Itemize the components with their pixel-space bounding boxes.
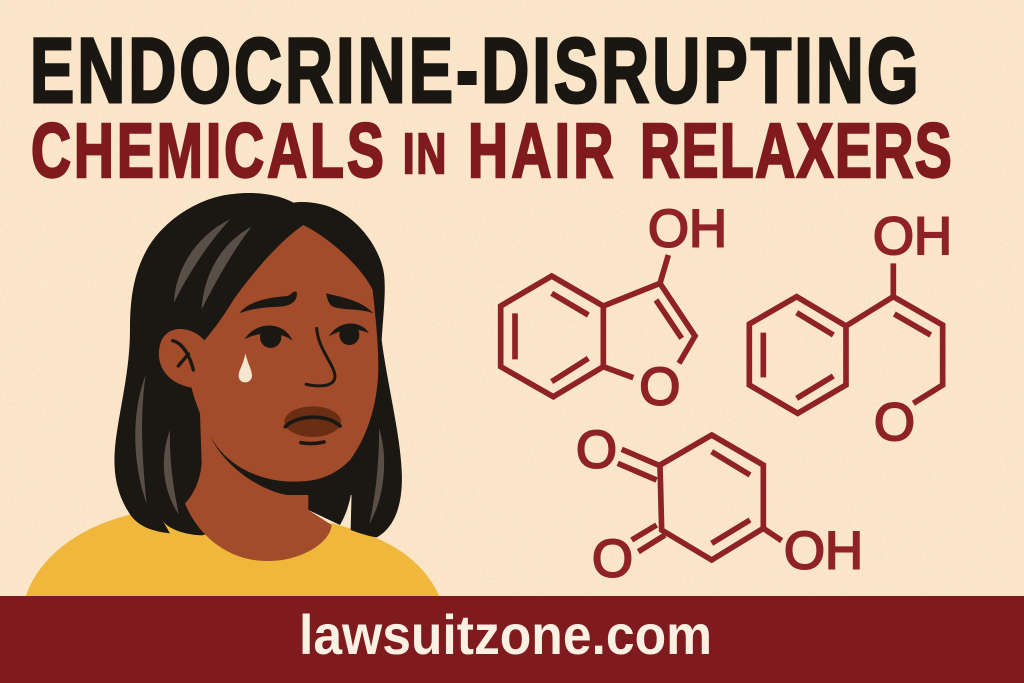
face <box>192 225 378 482</box>
hair highlights <box>135 219 384 524</box>
title line 2 <box>31 108 952 194</box>
ear <box>159 329 207 388</box>
molecule 2: OH <box>873 207 952 266</box>
molecule 1 <box>501 200 727 416</box>
eyebrows <box>239 291 373 313</box>
molecule 2: O <box>874 393 915 452</box>
nose <box>306 328 335 386</box>
title line 2: HAIR <box>468 108 613 194</box>
molecule 3: OH <box>784 521 863 580</box>
tear drop <box>239 353 252 382</box>
mouth <box>284 406 341 437</box>
molecule 3: O <box>592 530 633 589</box>
ear detail <box>173 341 193 370</box>
shirt <box>26 515 439 596</box>
molecule 3 <box>576 421 863 589</box>
footer website text: lawsuitzone.com <box>299 603 712 666</box>
chemical structures <box>501 200 952 589</box>
hair <box>114 193 402 537</box>
eyes <box>244 323 369 348</box>
title line 2: IN <box>403 121 446 186</box>
title line 1: ENDOCRINE-DISRUPTING <box>30 18 918 122</box>
illustration: worried woman <box>26 193 439 596</box>
title line 2: CHEMICALS <box>31 108 384 194</box>
molecule 1: OH <box>648 200 727 259</box>
molecule 1: O <box>639 357 680 416</box>
molecule 3: O <box>576 421 617 480</box>
title line 2: RELAXERS <box>640 108 952 194</box>
mouth line <box>285 417 340 427</box>
molecule 2 <box>749 207 952 452</box>
lower lip line <box>301 442 324 443</box>
neck <box>185 413 332 561</box>
jaw shadow <box>209 433 353 495</box>
footer band <box>0 596 1024 683</box>
